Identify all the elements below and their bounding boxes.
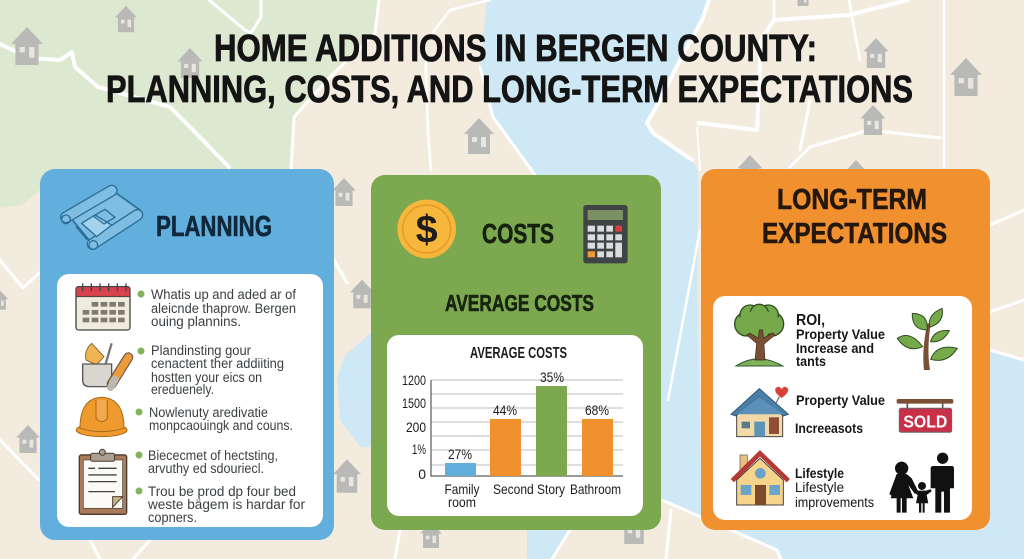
bar chart: 1200: [402, 372, 426, 388]
bullet list: copners.: [148, 510, 197, 525]
bar chart: 27%: [448, 446, 472, 462]
heading: long-term expectations: LONG-TERM: [777, 184, 927, 216]
bullet list: monpcaouingk and couns.: [149, 418, 293, 433]
text: lifestyle: [795, 465, 874, 510]
text: lifestyle: improvements: [795, 494, 874, 510]
icon: tools: [83, 343, 128, 387]
heading: planning: PLANNING: [156, 211, 272, 243]
icon: sold sign: [897, 399, 953, 432]
bar chart: Bathroom: [570, 481, 621, 497]
text: property value: Increeasots: [795, 420, 863, 436]
heading: long-term expectations: EXPECTATIONS: [762, 218, 947, 250]
panel: costs: [371, 175, 661, 530]
icon: sold sign: SOLD: [903, 411, 947, 431]
bar chart: 68%: [585, 402, 609, 418]
bullet list: [136, 287, 306, 525]
title: HOME ADDITIONS IN BERGEN COUNTY:: [214, 28, 817, 70]
bullet list: Whatis up and aded ar of: [151, 287, 296, 302]
icon: blueprint: [62, 190, 140, 249]
icon: hard hat: [76, 397, 127, 437]
bar chart: Second Story: [493, 481, 565, 497]
bullet list: hostten your eics on: [151, 370, 262, 385]
text: lifestyle: Lifestyle: [795, 465, 844, 481]
bar chart: [402, 369, 623, 510]
icon: calendar: [76, 283, 130, 330]
bullet list: Nowlenuty aredivatie: [149, 405, 268, 420]
icon: dollar coin: $: [416, 208, 438, 252]
icon: tree: [735, 304, 784, 366]
bullet list: Trou be prod dp four bed: [148, 484, 296, 499]
text: property value: [795, 392, 885, 436]
bar chart: 1%: [412, 441, 426, 457]
icon: red house: [732, 453, 788, 505]
text: lifestyle: Lifestyle: [795, 479, 844, 495]
bullet list: cenactent ther addiiting: [151, 356, 284, 371]
icon: blue house with heart: [731, 387, 788, 437]
bullet list: weste bägem is hardar for: [147, 497, 306, 512]
bar chart: room: [448, 494, 476, 510]
title: [106, 28, 913, 111]
white card: planning list: [57, 274, 323, 527]
bullet list: ereduenely.: [151, 382, 214, 397]
bullet list: arvuthy ed sdouriecl.: [148, 461, 264, 476]
text: property value: Property Value: [796, 392, 885, 408]
bar chart: 1500: [402, 395, 426, 411]
text: ROI: Increase and: [796, 340, 874, 356]
icon: calculator: [583, 205, 628, 263]
bar chart: 35%: [540, 369, 564, 385]
text: ROI: Property Value: [796, 326, 885, 342]
heading: costs: COSTS: [482, 218, 554, 249]
bar chart: 200: [406, 419, 426, 435]
white card: bar chart: [387, 335, 643, 516]
bullet list: Plandinsting gour: [151, 343, 251, 358]
bar chart: 44%: [493, 402, 517, 418]
chart title: AVERAGE COSTS: [470, 345, 567, 362]
icon: sapling: [897, 308, 957, 370]
bar chart: 0: [418, 466, 426, 482]
white card: expectations: [713, 296, 972, 520]
icon: family: [889, 453, 954, 513]
panel: long-term expectations: [701, 169, 990, 530]
bullet list: ouing plannins.: [151, 314, 241, 329]
subheading: average costs: AVERAGE COSTS: [445, 290, 594, 316]
bullet list: aleicnde thaprow. Bergen: [151, 301, 296, 316]
heading: long-term expectations: [762, 184, 947, 250]
panel: planning: [40, 169, 334, 540]
text: ROI: tants: [796, 353, 826, 369]
bullet list: Biececmet of hectsting,: [148, 448, 278, 463]
text: ROI: [796, 312, 885, 369]
icon: clipboard: [79, 449, 127, 514]
text: ROI: ROI,: [796, 312, 825, 329]
icon: dollar coin: [397, 200, 456, 258]
bar chart: Family: [444, 481, 480, 497]
